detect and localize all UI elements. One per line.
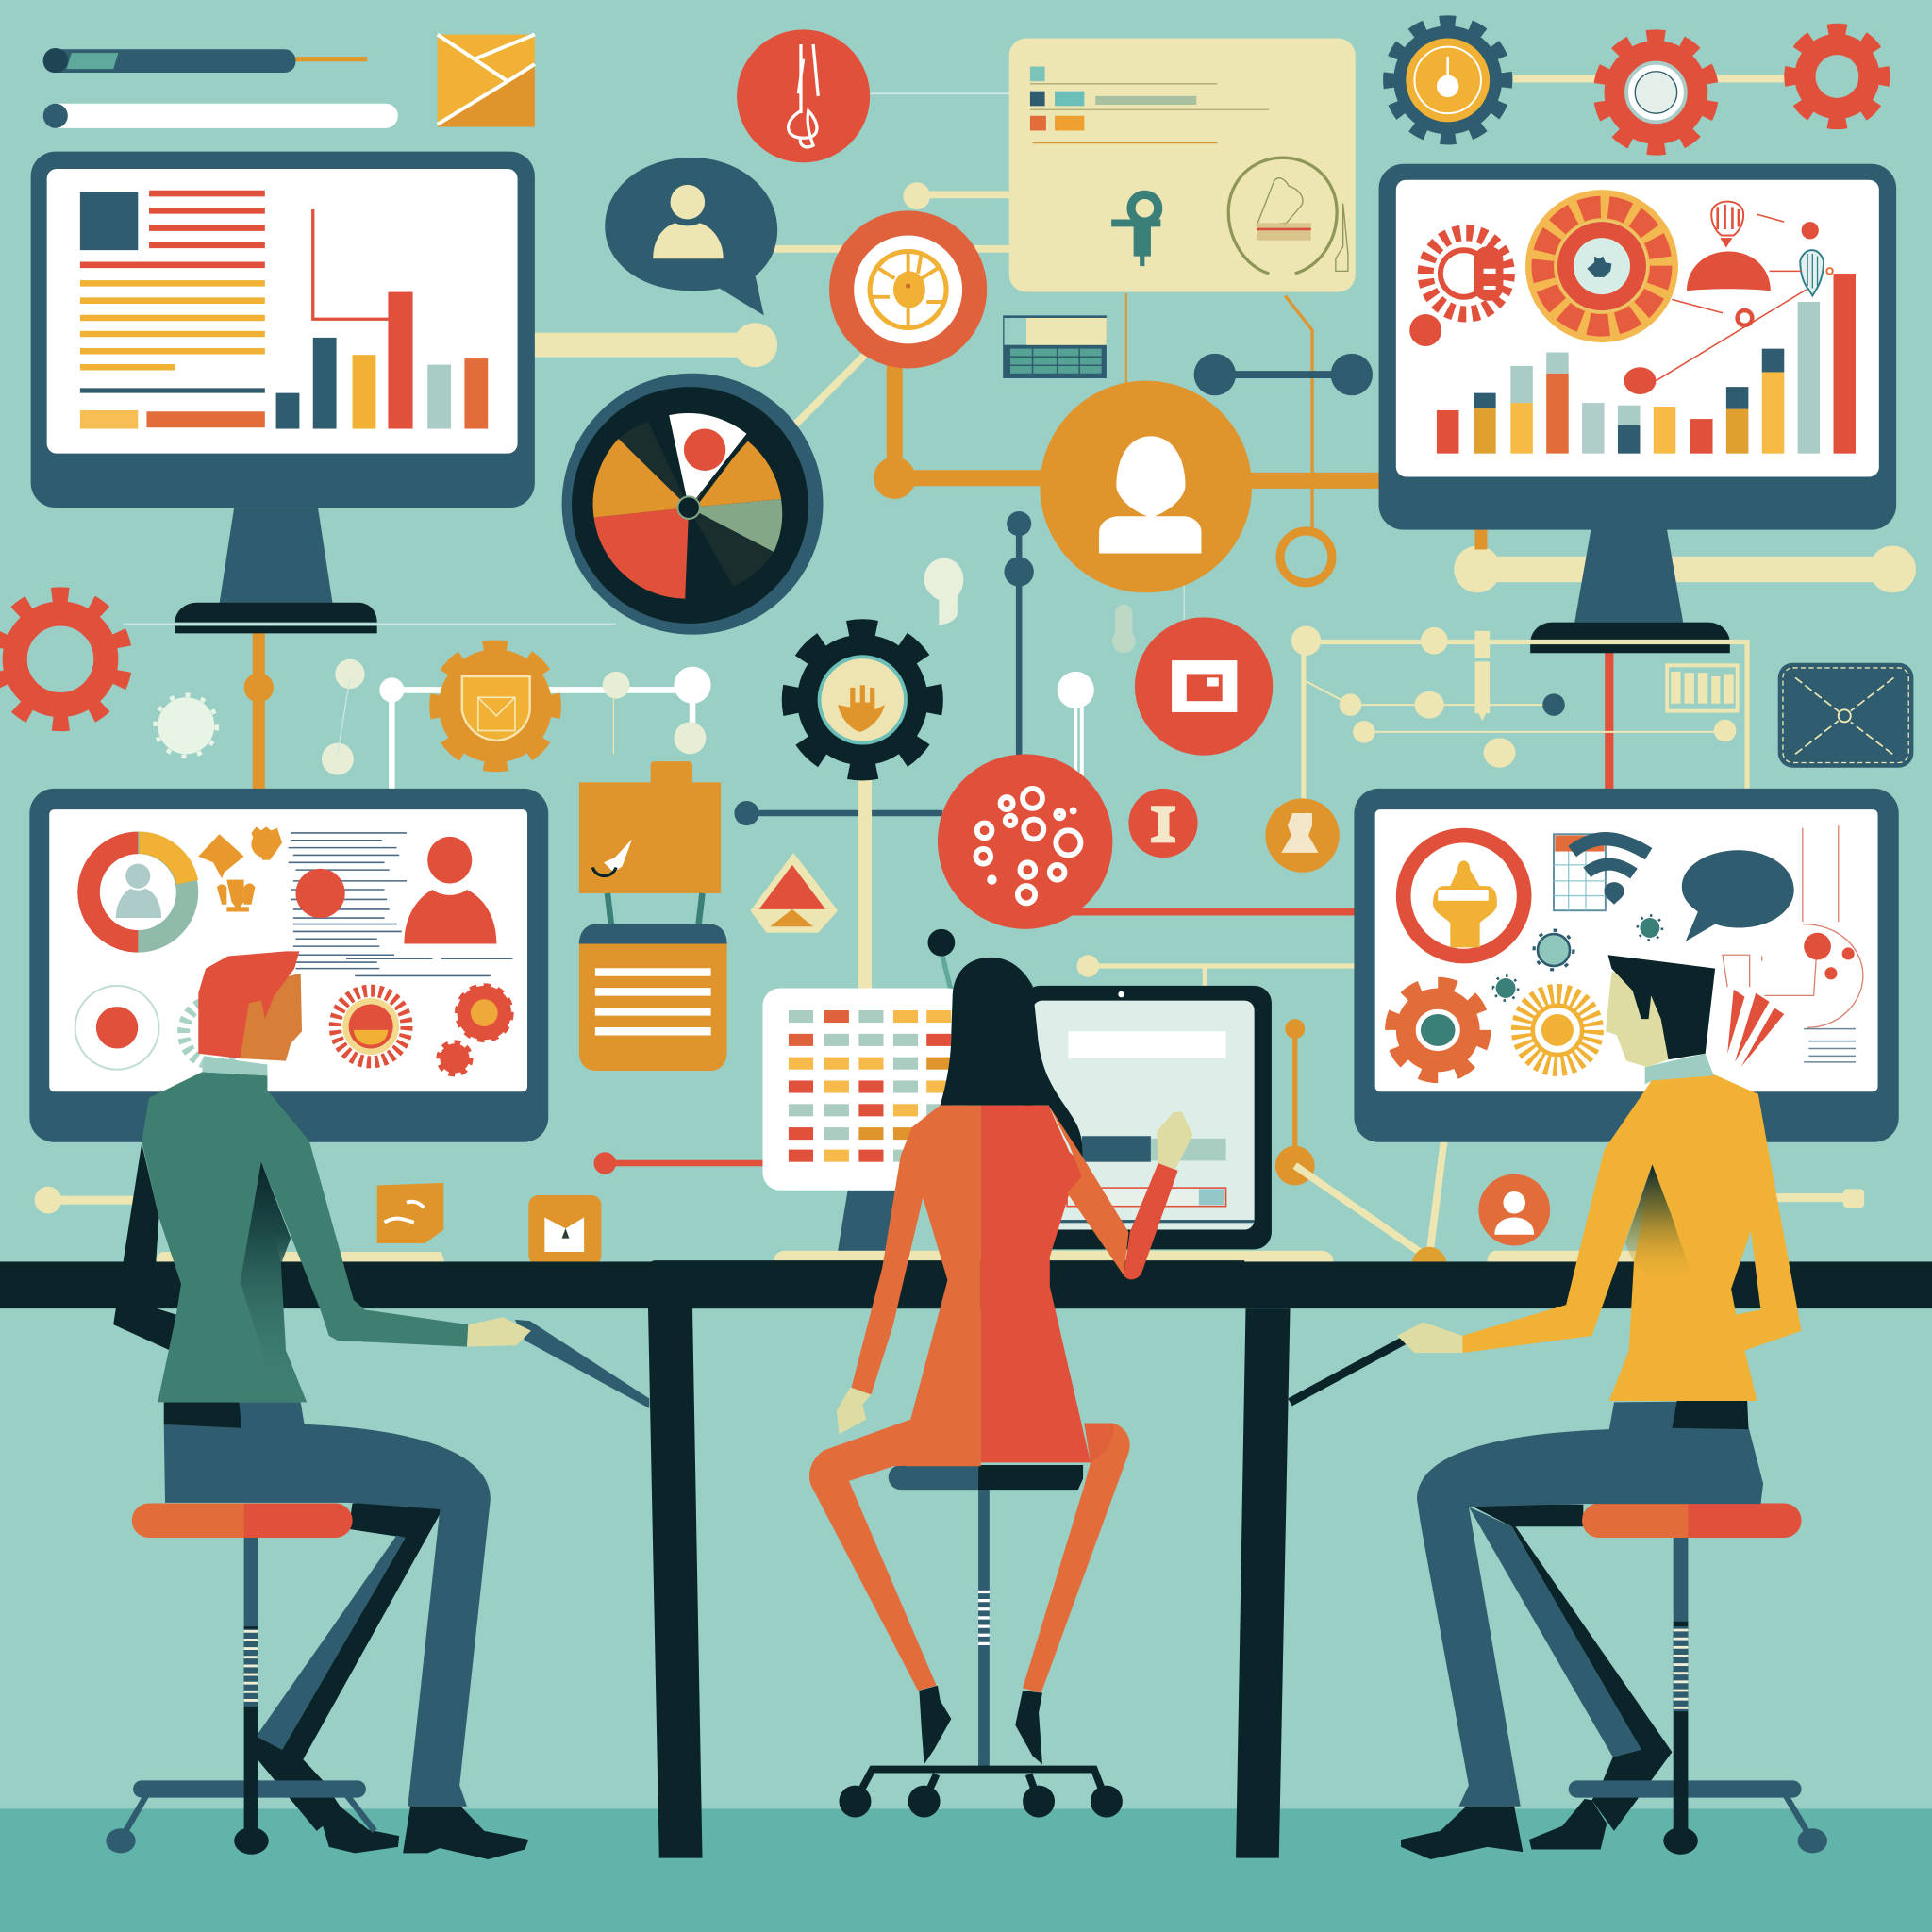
- legs: [809, 1420, 961, 1690]
- trousers: [1417, 1401, 1763, 1807]
- shoe: [403, 1807, 528, 1859]
- figure: woman in red, centre: [809, 958, 1192, 1818]
- icon: small orange envelope: [528, 1195, 601, 1265]
- icon: stitched pouch: [1778, 663, 1913, 768]
- trousers: [164, 1402, 491, 1807]
- seat: [132, 1503, 353, 1538]
- text block: [80, 192, 265, 429]
- gear: red with lens: [1592, 29, 1720, 156]
- orange dome node: [1412, 1247, 1446, 1261]
- connector between gears: [1513, 76, 1792, 82]
- thin line across stand base: [124, 624, 616, 625]
- icon: red person circle: [1478, 1174, 1550, 1245]
- icon: small gears: [439, 986, 511, 1074]
- tablet: [1023, 986, 1272, 1249]
- icon: segmented wheel: [1525, 190, 1678, 342]
- back arm: [113, 1143, 176, 1351]
- monitor: lower right dashboard: [1354, 789, 1899, 1142]
- icon: list card: [579, 924, 727, 1071]
- icon: orange badges: [198, 826, 282, 912]
- icon: envelope: [438, 35, 535, 127]
- icon: top slider bars: [43, 48, 398, 128]
- bar chart: [276, 209, 488, 429]
- gear: orange with shield: [425, 635, 566, 777]
- icon: red ring with tower: [1404, 836, 1524, 957]
- head: [1606, 955, 1715, 1067]
- figure: man in yellow, right: [1397, 955, 1827, 1859]
- icon: red square circle: [1135, 617, 1273, 756]
- gear: dark teal with dial: [1383, 15, 1513, 145]
- rear leg: [257, 1502, 441, 1853]
- sweater: [142, 1072, 468, 1402]
- base shelf: [774, 1251, 1333, 1261]
- icon: red spikes: [1727, 990, 1784, 1067]
- rear leg: [1469, 1505, 1672, 1849]
- collar: [202, 1056, 267, 1075]
- icon: yellow sun: [1522, 994, 1593, 1066]
- icon: speech bubble with person: [605, 158, 777, 315]
- figure: man in green, left: [106, 951, 531, 1859]
- icon: virus dots: [1493, 915, 1662, 1001]
- sweater: [1462, 1074, 1802, 1401]
- collar: [1645, 1054, 1714, 1084]
- icon: dome and markers: [1624, 202, 1833, 394]
- chair: [839, 1465, 1123, 1818]
- icon: target: [75, 986, 158, 1070]
- icon: small orange bubble: [377, 1183, 443, 1243]
- text lines: [1804, 1029, 1856, 1062]
- arm right: [1049, 1106, 1128, 1275]
- bar chart: [1437, 274, 1856, 454]
- text lines: [289, 833, 512, 975]
- stipple shade: [241, 1162, 307, 1402]
- icon: red sunburst: [1409, 233, 1507, 346]
- icon: network sketch: [1723, 825, 1863, 1027]
- monitor: lower left dashboard: [29, 789, 548, 1142]
- floor: [0, 1808, 1932, 1932]
- hand: [467, 1317, 531, 1347]
- shoe: [1401, 1807, 1523, 1859]
- gear: red small: [1782, 22, 1892, 131]
- stipple shade: [1625, 1164, 1690, 1284]
- gear: red left: [0, 588, 132, 731]
- gear: black with hand: [778, 616, 946, 784]
- icon: pale splat: [156, 695, 217, 757]
- icon: calendar and wifi: [1554, 834, 1649, 910]
- keyhole shapes: [924, 558, 1136, 653]
- icon: person: [404, 837, 496, 943]
- icon: small table card: [1003, 315, 1107, 378]
- hair back: [941, 958, 1082, 1163]
- panel stand: [838, 1191, 899, 1251]
- icon: orange gear: [1392, 985, 1484, 1075]
- head: [198, 951, 302, 1061]
- icon: clipboard check: [579, 761, 721, 924]
- icon: small tag: [1667, 665, 1738, 711]
- monitor: bar chart top left: [31, 152, 535, 633]
- hand right: [1157, 1111, 1192, 1170]
- icon: red circle with pillar: [1128, 789, 1198, 858]
- stool: [106, 1534, 375, 1855]
- dress: [852, 1106, 981, 1466]
- monitor: analytics top right: [1379, 164, 1896, 653]
- seat: [1582, 1503, 1802, 1538]
- icon: target circle with sun: [829, 210, 987, 369]
- icon: red scribble circle: [737, 29, 870, 162]
- desk: [0, 1260, 1932, 1858]
- icon: speech bubble: [1682, 850, 1794, 941]
- icon: ring sketch: [1228, 158, 1348, 274]
- stool: [1569, 1534, 1827, 1855]
- belt: [1672, 1401, 1748, 1429]
- connector lines: [35, 93, 1916, 1261]
- icon: orange circle with figure: [1265, 798, 1340, 873]
- belt: [164, 1402, 242, 1428]
- note panel: [1009, 38, 1356, 292]
- donut chart: [89, 842, 188, 941]
- icon: triangle warning: [750, 853, 838, 933]
- heat grid card: [762, 989, 966, 1191]
- icon: key: [1111, 194, 1160, 266]
- shoes: [919, 1686, 951, 1764]
- hand: [1397, 1322, 1462, 1353]
- icon: red cell circle: [938, 754, 1112, 929]
- icon: red sunburst badge: [335, 991, 407, 1062]
- icon: person circle: [1040, 381, 1252, 592]
- pie chart gauge: [562, 374, 823, 635]
- node network over stand base: [1291, 626, 1747, 789]
- hand left: [837, 1388, 871, 1434]
